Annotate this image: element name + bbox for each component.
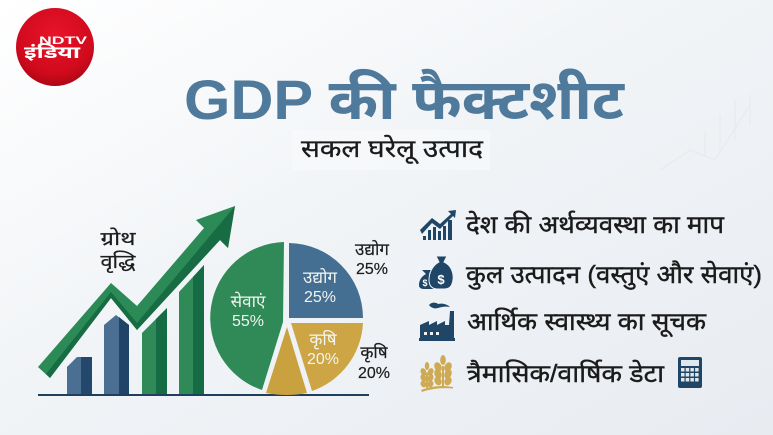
outer label: agriculture: 20% — [358, 365, 390, 382]
icon: growth chart — [420, 210, 456, 240]
labels inside pie: 25% — [304, 289, 336, 306]
subtitle: सकल घरेलू उत्पाद — [301, 133, 484, 164]
title: GDP की फैक्टशीट — [184, 68, 625, 131]
icon: money bags: $ — [422, 278, 428, 288]
growth label: ग्रोथ — [100, 228, 137, 250]
icon: money bags — [419, 256, 453, 289]
slice: agriculture left — [266, 327, 307, 395]
labels inside pie: उद्योग — [303, 267, 337, 287]
bar 4 — [179, 265, 204, 395]
icon: money bags: $ — [437, 272, 445, 287]
pie chart — [210, 242, 363, 395]
growth label: वृद्धि — [100, 251, 136, 274]
slice: industry — [289, 243, 363, 318]
labels inside pie: 55% — [232, 313, 264, 330]
logo: NDTV India: इंडिया — [24, 42, 81, 62]
fact 1: देश की अर्थव्यवस्था का माप — [466, 209, 725, 239]
logo: NDTV India — [16, 8, 94, 86]
fact 3: आर्थिक स्वास्थ्य का सूचक — [467, 307, 707, 337]
icon: wheat — [419, 355, 453, 392]
baseline — [38, 394, 369, 396]
icon: factory — [419, 303, 455, 341]
subtitle — [292, 130, 490, 170]
outer label: industry: उद्योग — [355, 239, 389, 259]
bar 2 — [104, 315, 129, 395]
fact 2: कुल उत्पादन (वस्तुएं और सेवाएं) — [466, 259, 762, 290]
outer label: agriculture: कृषि — [360, 342, 389, 364]
bar 3 — [142, 308, 167, 395]
labels inside pie: कृषि — [309, 329, 338, 351]
outer label: industry — [355, 239, 389, 278]
icon: calculator — [678, 357, 702, 388]
fact 4: त्रैमासिक/वार्षिक डेटा — [467, 358, 665, 388]
fact list — [466, 209, 762, 388]
outer label: agriculture — [358, 342, 390, 382]
logo: NDTV India: NDTV — [39, 35, 88, 47]
growth arrow — [38, 206, 235, 378]
slice: agriculture right — [291, 323, 363, 391]
slice: services — [210, 242, 284, 390]
outer label: industry: 25% — [356, 261, 388, 278]
bar chart with growth arrow — [38, 206, 369, 396]
labels inside pie: 20% — [307, 351, 339, 368]
labels inside pie: सेवाएं — [231, 290, 266, 311]
labels inside pie — [231, 267, 339, 368]
bar 1 — [67, 357, 92, 395]
growth label — [100, 228, 137, 274]
